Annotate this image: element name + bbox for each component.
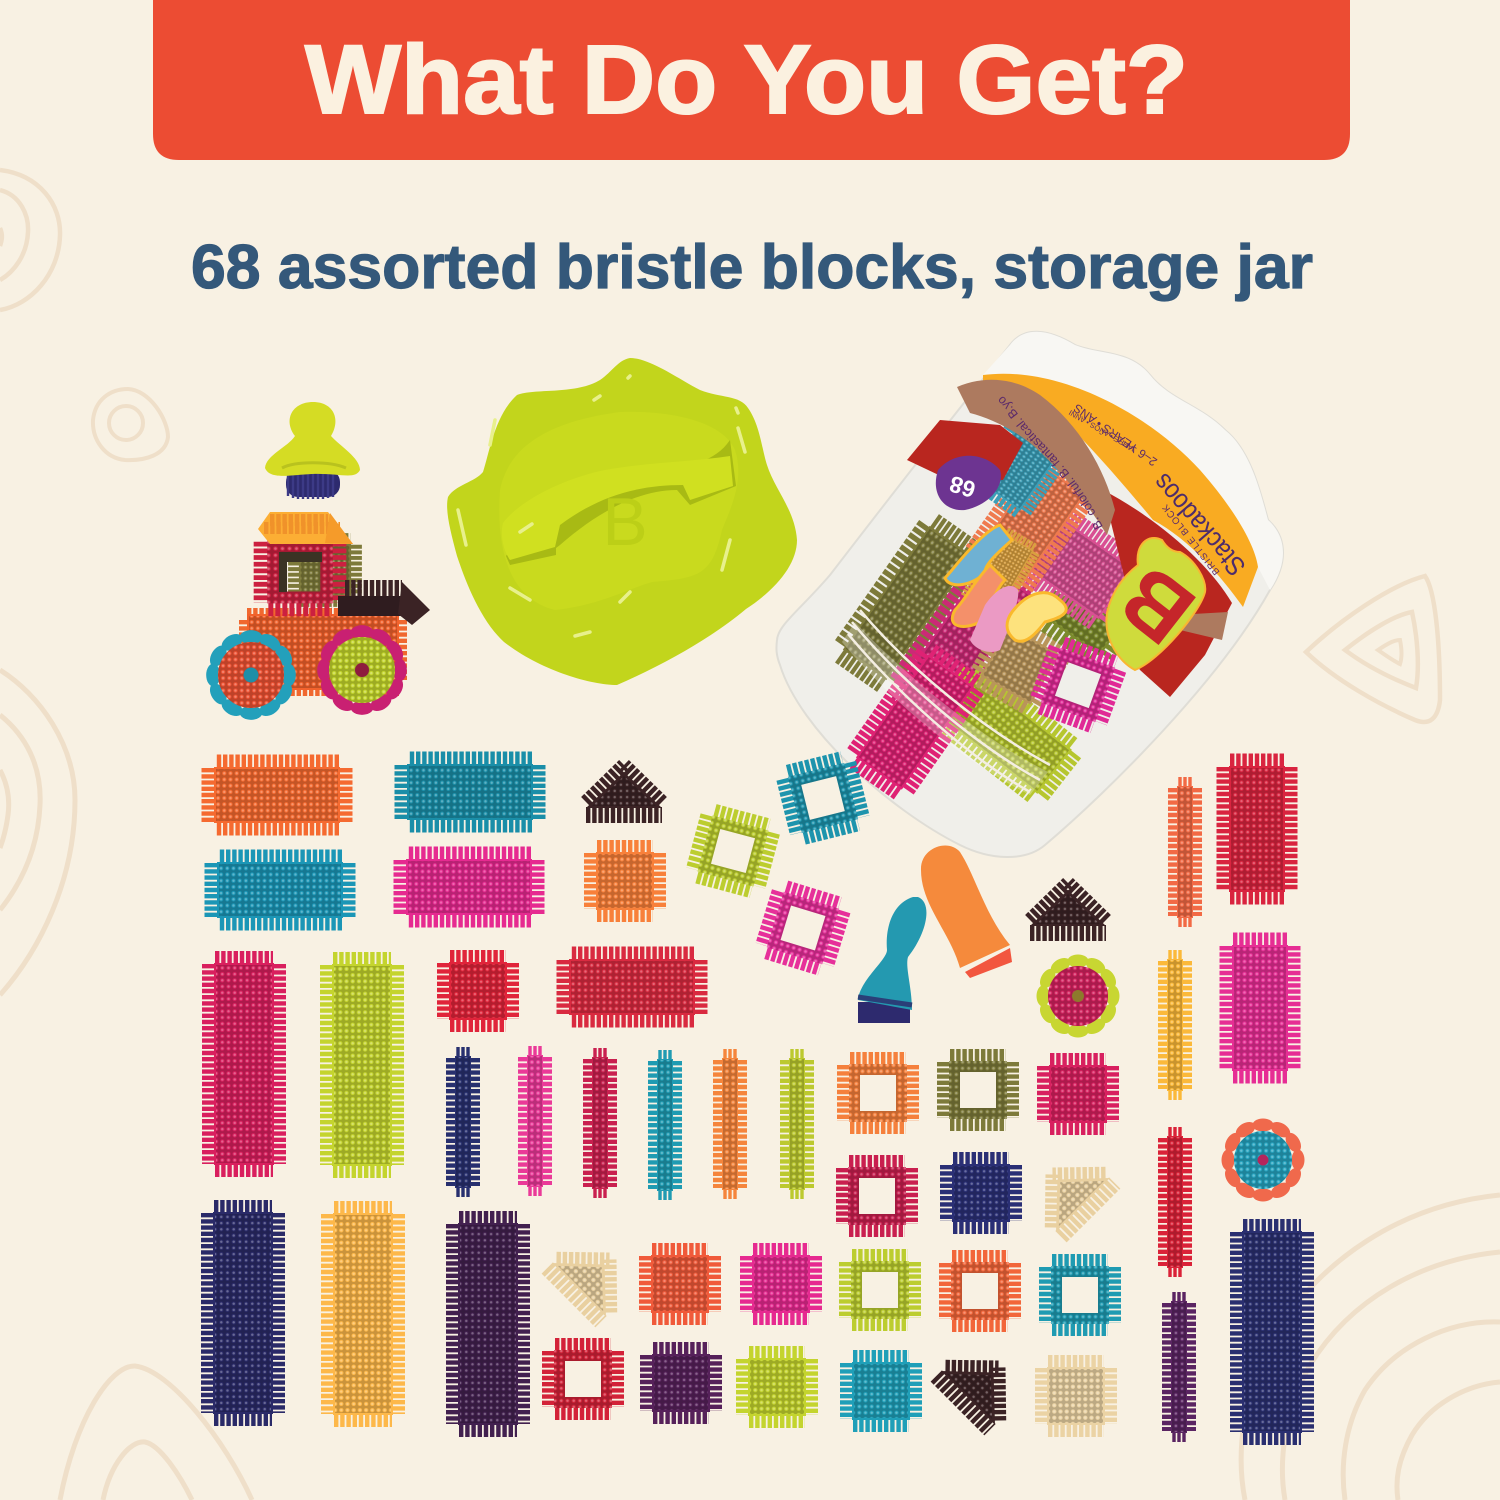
train: orange body — [245, 614, 401, 690]
jar: upper clear section — [983, 332, 1283, 590]
flower: lime and crimson — [1036, 954, 1120, 1038]
block: red wide — [563, 953, 701, 1021]
label: age range: 2–6 YEARS • ANS — [1071, 401, 1160, 469]
title: What Do You Get? — [305, 25, 1188, 134]
block: brown triangle right — [1030, 883, 1106, 933]
block: orange frame — [844, 1059, 912, 1127]
label: red upper band — [907, 420, 1023, 480]
block: orange frame lower — [946, 1257, 1014, 1325]
block: orange wide — [208, 761, 346, 829]
block: purple thin right — [1167, 1292, 1191, 1442]
train: red cab frame — [262, 535, 338, 609]
block: pink square — [747, 1250, 815, 1318]
lid: handle shadow — [506, 440, 736, 565]
jar: body — [776, 332, 1283, 857]
block: teal square — [847, 1357, 915, 1425]
stamper: orange — [921, 846, 1012, 978]
block: lime tall — [327, 959, 397, 1171]
block: cream square — [1042, 1362, 1110, 1430]
bristle blocks — [208, 757, 1307, 1442]
block: orange thin right — [1173, 777, 1197, 927]
jar: contents — [834, 403, 1144, 802]
block: teal frame lower — [1046, 1261, 1114, 1329]
label: age translations: JAHRE • AÑOS • ANNI — [1067, 408, 1138, 454]
lid: logo emboss: B — [602, 484, 648, 560]
block: navy thin — [451, 1047, 475, 1197]
block: crimson frame — [843, 1162, 911, 1230]
label: brown band — [957, 380, 1115, 535]
block: yellow thin right — [1163, 950, 1187, 1100]
block: olive frame — [944, 1056, 1012, 1124]
jar: neck translucent band — [842, 622, 1048, 795]
block: red right — [1223, 760, 1291, 898]
block: teal wide top — [401, 758, 539, 826]
title banner — [153, 0, 1350, 160]
block: navy tall — [208, 1207, 278, 1419]
label: tagline: B. colorful. B. fantastical. B.you — [999, 396, 1102, 530]
block: navy right tall — [1237, 1226, 1307, 1438]
label: brand name: Stackadoos — [1147, 468, 1252, 582]
jar: neck rings — [848, 610, 1050, 792]
train: teal and red wheel — [206, 630, 296, 720]
block: crimson thin — [588, 1048, 612, 1198]
label: red lower band — [1103, 490, 1232, 697]
train: brown triangle — [338, 582, 430, 625]
block: pink frame rotated — [761, 886, 845, 970]
block: pink wide — [400, 853, 538, 921]
stamper: lime knob — [265, 402, 360, 499]
train — [206, 512, 430, 720]
block: red small square — [444, 957, 512, 1025]
stamper: teal — [858, 897, 926, 1023]
block: teal wide lower — [211, 856, 349, 924]
block: crimson square — [1044, 1060, 1112, 1128]
lid: gloss highlights — [458, 376, 745, 636]
block: orange red square — [646, 1250, 714, 1318]
block: lime square — [743, 1353, 811, 1421]
block: orange thin — [718, 1049, 742, 1199]
block: cream triangle right — [1026, 1148, 1115, 1237]
label: product type: BRISTLE BLOCK — [1160, 501, 1222, 577]
block: dark purple tall — [453, 1218, 523, 1430]
block: purple square — [647, 1349, 715, 1417]
block: pink thin — [523, 1046, 547, 1196]
label: die-cut windows — [945, 525, 1066, 652]
block: red frame — [549, 1345, 617, 1413]
block: lime thin — [785, 1049, 809, 1199]
subtitle: 68 assorted bristle blocks, storage jar — [191, 233, 1313, 302]
lid: handle — [502, 456, 733, 560]
storage jar — [776, 330, 1284, 858]
block: cream triangle left — [547, 1233, 636, 1322]
lid: inner bowl — [499, 412, 738, 610]
block: teal frame rotated — [782, 757, 864, 839]
label: yellow band — [983, 374, 1258, 607]
block: brown triangle lower — [936, 1341, 1025, 1430]
train: yellow roof — [258, 512, 353, 544]
train: cab window shadow — [279, 552, 322, 592]
block: orange square — [591, 847, 659, 915]
block: teal thin — [653, 1050, 677, 1200]
green jar lid — [447, 358, 797, 685]
block: brown triangle top — [586, 765, 662, 815]
block: lime frame rotated — [691, 809, 775, 893]
train: olive back block — [294, 539, 356, 601]
train: magenta and lime wheel — [317, 625, 407, 715]
label: B logo tag: B — [1101, 547, 1212, 664]
block: red thin right — [1163, 1127, 1187, 1277]
block: navy square — [947, 1159, 1015, 1227]
block: pink right — [1226, 939, 1294, 1077]
flower: coral and teal — [1222, 1118, 1304, 1202]
label: lower brown strip — [1176, 612, 1228, 640]
block: crimson tall — [209, 958, 279, 1170]
label: purple 68 badge — [936, 456, 1001, 510]
block: lime frame — [846, 1256, 914, 1324]
block: yellow tall — [328, 1208, 398, 1420]
label: purple 68 badge: 68 — [946, 471, 978, 503]
